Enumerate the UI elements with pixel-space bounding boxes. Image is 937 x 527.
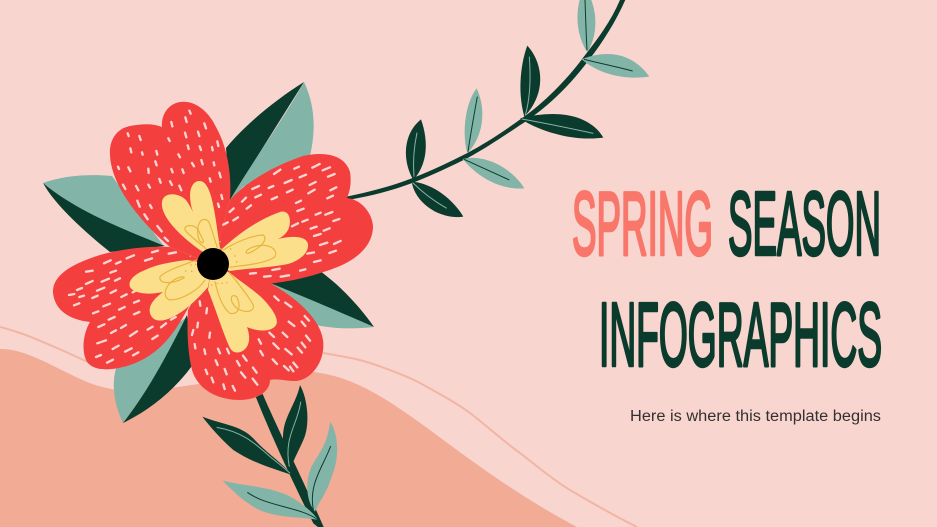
petal dashes [69,111,341,391]
leaf: dark left [202,417,292,475]
leaf: dark lower 1 [412,182,463,217]
flower [43,82,374,423]
peach hill [0,349,577,527]
branch stem [347,0,626,200]
flower centre [197,248,229,280]
top petal dashes [118,111,222,241]
bottom petal dashes [192,296,310,391]
left petal dashes [69,251,176,363]
lower stem with leaves [202,385,337,527]
leaf: dark right 3 [520,114,603,139]
leaf: teal upper 2 [465,88,482,153]
leaf: teal right 4 [582,54,649,78]
leaf: teal lower 2 [463,158,524,189]
leaf: dark upper 1 [406,119,426,180]
title [572,174,882,386]
thin wave line [0,327,637,527]
branch with leaves [347,0,649,217]
leaf: teal left [223,481,318,520]
title: SPRING [572,174,713,274]
lower stem [256,394,330,527]
yellow inner petals [130,181,308,352]
leaf: dark upper [283,385,307,467]
red petals [53,102,373,400]
leaf: dark upper 3 [520,46,540,117]
right petal dashes [223,164,341,277]
leaf: teal upper 4 [577,0,595,53]
large leaves behind flower [43,82,374,423]
gold line details [160,219,276,314]
leaf: teal upper [307,422,337,512]
subtitle: Here is where this template begins [630,408,881,425]
